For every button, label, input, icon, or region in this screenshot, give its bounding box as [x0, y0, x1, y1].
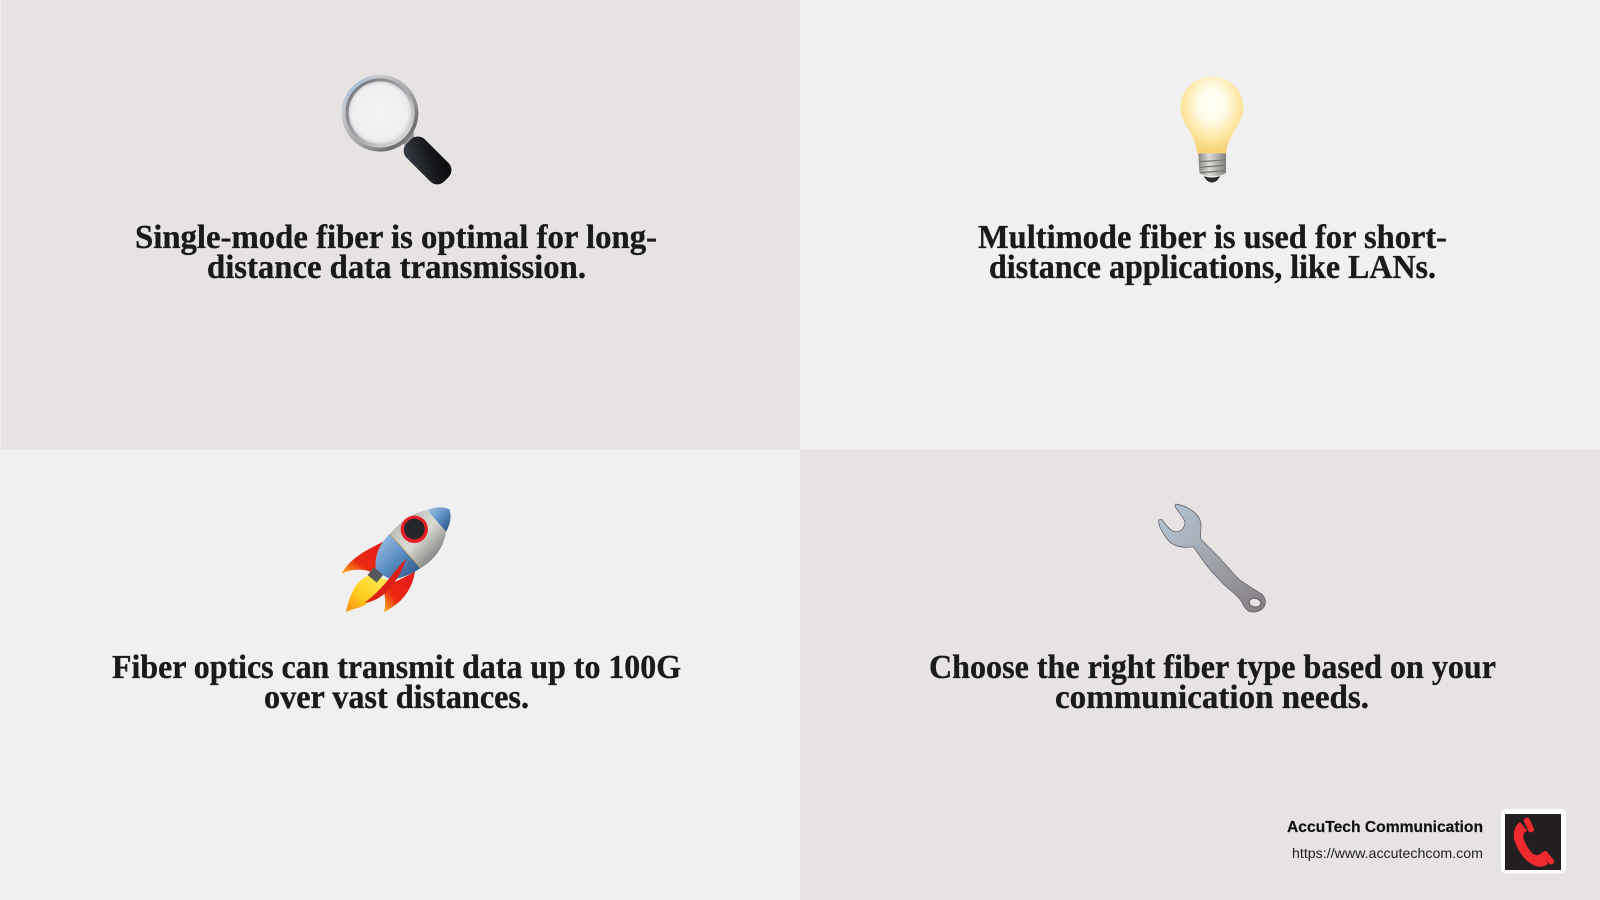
heading: multimode: Multimode fiber is used for short-: [978, 219, 1447, 256]
heading: choose fiber: Choose the right fiber type based on your: [929, 649, 1496, 686]
heading: multimode: distance applications, like LANs.: [989, 249, 1436, 286]
icon: rocket: [341, 507, 451, 612]
panel: multimode fiber: [800, 0, 1600, 450]
brand url: https://www.accutechcom.com: [1292, 845, 1483, 861]
panel: data speed: [0, 450, 800, 900]
icon: light bulb: [1181, 77, 1243, 182]
logo: red phone: [1501, 809, 1566, 874]
heading: single-mode: Single-mode fiber is optimal for long-: [135, 219, 657, 256]
panel: single-mode fiber: [0, 0, 800, 450]
heading: choose fiber: communication needs.: [1055, 679, 1369, 716]
icon: wrench: [1159, 504, 1265, 612]
heading: data speed: over vast distances.: [264, 679, 529, 716]
brand name: AccuTech Communication: [1287, 819, 1483, 836]
heading: single-mode: distance data transmission.: [207, 249, 586, 286]
heading: data speed: Fiber optics can transmit data up to 100G: [112, 649, 681, 686]
icon: magnifying glass: [342, 75, 456, 188]
panel: choose fiber type: [800, 450, 1600, 900]
